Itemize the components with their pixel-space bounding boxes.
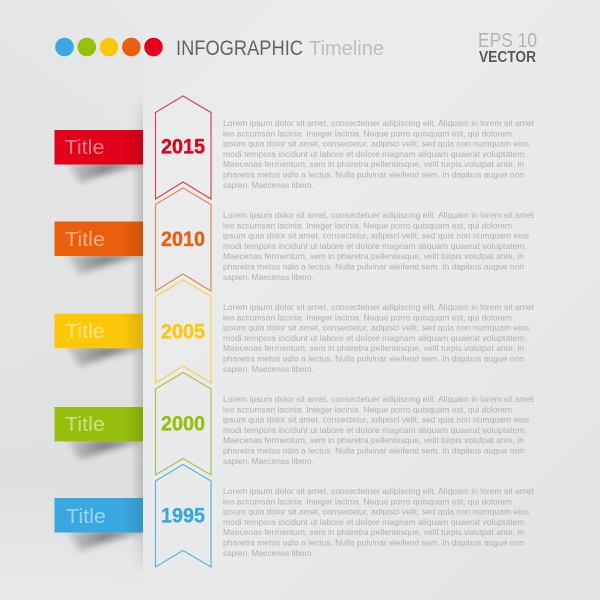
banner: 2015 title: Title: [64, 137, 104, 159]
text block: 2005: pharetra metus odio a lectus. Nulla pulvinar eleifend sem. In dapibus augue non: [223, 354, 524, 364]
banner: 2000 title: Title: [65, 414, 105, 436]
banner: 2005 title: [54, 314, 143, 367]
text block: 2005: leo accumsan lacinia. Integer lacinia. Neque porro quisquam est, qui dolorem: [223, 312, 512, 322]
text block: 2005: Maecenas fermentum, sem in pharetra pellentesque, velit turpis volutpat ante, in: [223, 343, 524, 353]
banner: 1995 title: Title: [66, 506, 106, 528]
text block: 2010: pharetra metus odio a lectus. Nulla pulvinar eleifend sem. In dapibus augue non: [223, 262, 524, 272]
chevron: 2010: 2010: [161, 228, 205, 251]
title: INFOGRAPHIC: [176, 37, 303, 60]
text block: 2015: modi tempora incidunt ut labore et dolore magnam aliquam quaerat voluptatem.: [223, 149, 527, 159]
text block: 2000: sapien. Maecenas libero.: [223, 456, 314, 466]
text block: 2010: modi tempora incidunt ut labore et dolore magnam aliquam quaerat voluptatem.: [223, 241, 527, 251]
text block: 2010: leo accumsan lacinia. Integer lacinia. Neque porro quisquam est, qui dolorem: [223, 220, 512, 230]
text block: 2010: ipsum quia dolor sit amet, consectetur, adipisci velit, sed quia non numquam eius: [223, 231, 529, 241]
banner: 2010 title: [54, 222, 143, 274]
text block: 2000: Maecenas fermentum, sem in pharetra pellentesque, velit turpis volutpat ante, in: [223, 435, 524, 445]
banner: 2000 title: [54, 407, 143, 460]
text block: 1995: leo accumsan lacinia. Integer lacinia. Neque porro quisquam est, qui dolorem: [223, 496, 512, 506]
banner: 2015 title: [54, 130, 143, 183]
text block: 2010: [223, 210, 535, 282]
text block: 2010: sapien. Maecenas libero.: [223, 272, 314, 282]
title: Timeline: [309, 38, 384, 60]
EPS 10 vector badge: VECTOR: [479, 49, 536, 66]
text block: 2015: sapien. Maecenas libero.: [223, 180, 314, 190]
text block: 2000: leo accumsan lacinia. Integer lacinia. Neque porro quisquam est, qui dolorem: [223, 404, 512, 414]
text block: 2015: pharetra metus odio a lectus. Nulla pulvinar eleifend sem. In dapibus augue non: [223, 170, 524, 180]
text block: 2015: Lorem ipsum dolor sit amet, consectetuer adipiscing elit. Aliquam in lorem sit amet: [223, 118, 535, 128]
text block: 1995: [223, 486, 535, 558]
text block: 2000: [223, 394, 535, 466]
text block: 2000: Lorem ipsum dolor sit amet, consectetuer adipiscing elit. Aliquam in lorem sit amet: [223, 394, 535, 404]
text block: 2005: Lorem ipsum dolor sit amet, consectetuer adipiscing elit. Aliquam in lorem sit amet: [223, 302, 535, 312]
banner: 2010 title: Title: [65, 229, 105, 251]
text block: 2000: modi tempora incidunt ut labore et dolore magnam aliquam quaerat voluptatem.: [223, 425, 527, 435]
chevron: 2000: 2000: [161, 412, 205, 436]
text block: 1995: pharetra metus odio a lectus. Nulla pulvinar eleifend sem. In dapibus augue non: [223, 538, 524, 548]
text block: 2005: [223, 302, 535, 374]
text block: 1995: Lorem ipsum dolor sit amet, consectetuer adipiscing elit. Aliquam in lorem sit amet: [223, 486, 535, 496]
text block: 2000: ipsum quia dolor sit amet, consectetur, adipisci velit, sed quia non numquam eius: [223, 415, 529, 425]
vertical spine shadow: [134, 106, 143, 564]
text block: 2015: [223, 118, 535, 190]
text block: 2010: Maecenas fermentum, sem in pharetra pellentesque, velit turpis volutpat ante, in: [223, 251, 524, 261]
text block: 1995: sapien. Maecenas libero.: [223, 548, 314, 558]
banner: 2005 title: Title: [65, 321, 105, 343]
banner: 1995 title: [54, 498, 143, 551]
text block: 2015: ipsum quia dolor sit amet, consectetur, adipisci velit, sed quia non numquam eius: [223, 139, 529, 149]
chevron: 2005: 2005: [161, 320, 205, 344]
EPS 10 vector badge: [478, 30, 537, 66]
left background band: [0, 0, 143, 600]
text block: 2005: modi tempora incidunt ut labore et dolore magnam aliquam quaerat voluptatem.: [223, 333, 527, 343]
text block: 2005: ipsum quia dolor sit amet, consectetur, adipisci velit, sed quia non numquam eius: [223, 323, 529, 333]
chevron: 1995: [156, 464, 211, 567]
text block: 2015: Maecenas fermentum, sem in pharetra pellentesque, velit turpis volutpat ante, in: [223, 159, 524, 169]
text block: 2000: pharetra metus odio a lectus. Nulla pulvinar eleifend sem. In dapibus augue non: [223, 446, 524, 456]
text block: 1995: Maecenas fermentum, sem in pharetra pellentesque, velit turpis volutpat ante, in: [223, 527, 524, 537]
chevron: 2015: 2015: [161, 136, 205, 158]
text block: 2015: leo accumsan lacinia. Integer lacinia. Neque porro quisquam est, qui dolorem: [223, 128, 512, 138]
text block: 2005: sapien. Maecenas libero.: [223, 364, 314, 374]
chevron: 2010: [156, 188, 211, 291]
chevron: 2005: [156, 280, 211, 383]
chevron: 2000: [156, 372, 211, 475]
EPS 10 vector badge: EPS 10: [478, 30, 537, 52]
header colour dots: [55, 38, 163, 56]
text block: 2010: Lorem ipsum dolor sit amet, consectetuer adipiscing elit. Aliquam in lorem sit amet: [223, 210, 535, 220]
chevron: 1995: 1995: [161, 504, 205, 528]
chevron: 2015: [156, 96, 211, 199]
text block: 1995: modi tempora incidunt ut labore et dolore magnam aliquam quaerat voluptatem.: [223, 517, 527, 527]
text block: 1995: ipsum quia dolor sit amet, consectetur, adipisci velit, sed quia non numquam eius: [223, 507, 529, 517]
